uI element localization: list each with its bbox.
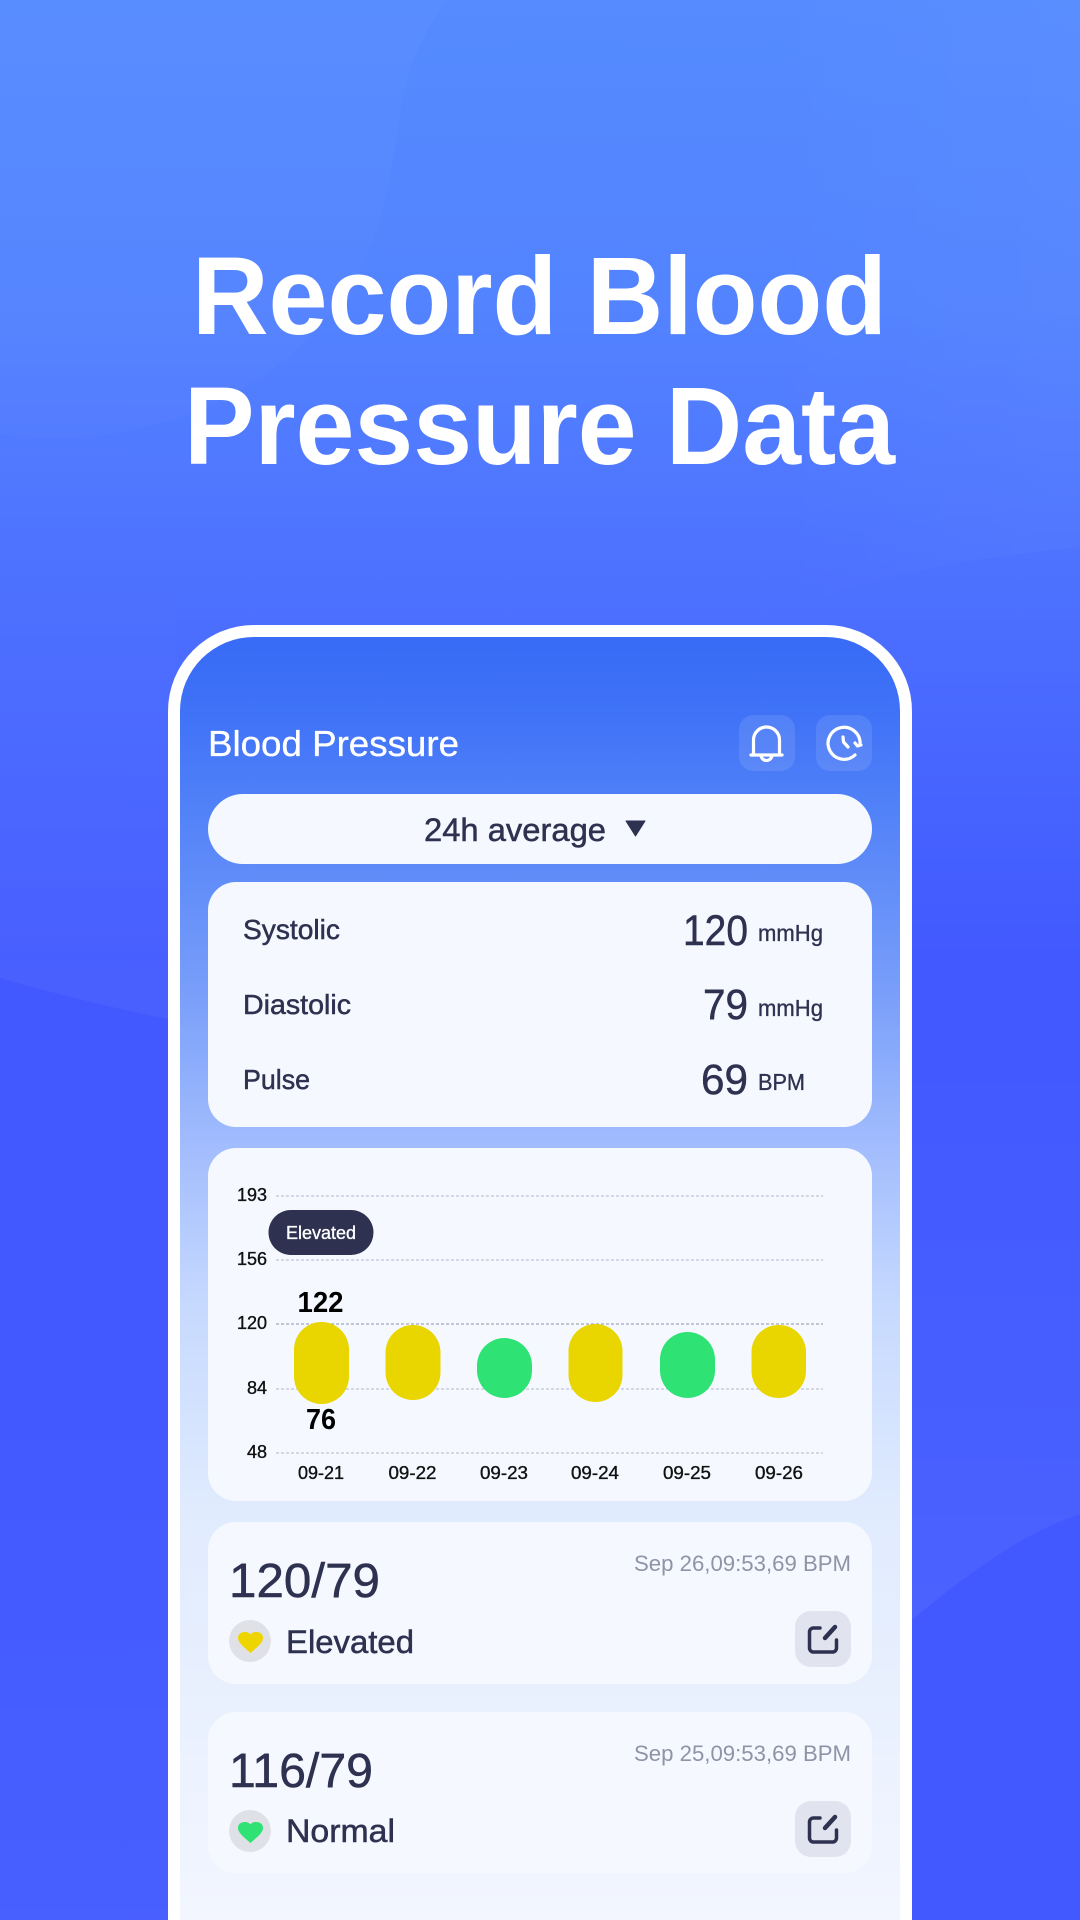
reading value: 120/79 — [229, 1555, 380, 1608]
reading value: 116/79 — [229, 1745, 373, 1798]
systolic row: mmHg — [758, 920, 823, 946]
diastolic row: Diastolic — [243, 989, 351, 1020]
panel: current readings — [208, 882, 872, 1127]
selected bar values — [298, 1287, 344, 1436]
dropdown: 24h average — [208, 794, 872, 864]
diastolic row — [243, 981, 823, 1029]
pulse row: 69 — [701, 1056, 748, 1104]
selected bar values: 76 — [306, 1404, 336, 1436]
record card: Sep 26 — [208, 1522, 872, 1684]
selected bar values: 122 — [298, 1287, 344, 1319]
icon: edit button — [795, 1801, 851, 1857]
x axis dates: 09-26 — [755, 1463, 803, 1483]
icon: history clock button — [816, 715, 872, 771]
y axis labels: 156 — [237, 1249, 267, 1269]
diastolic row: 79 — [703, 981, 748, 1029]
title: Record Blood — [192, 235, 887, 358]
dropdown: 24h average: 24h average — [424, 812, 606, 848]
icon: green heart — [229, 1810, 271, 1852]
title — [184, 235, 896, 488]
x axis dates: 09-22 — [388, 1463, 436, 1483]
systolic row: 120 — [683, 907, 748, 955]
range bars — [294, 1322, 806, 1404]
x axis dates: 09-25 — [663, 1463, 711, 1483]
pulse row — [243, 1056, 805, 1104]
icon: yellow heart — [229, 1620, 271, 1662]
title: Pressure Data — [184, 365, 896, 488]
status label: Elevated — [286, 1624, 414, 1660]
status label: Normal — [286, 1813, 395, 1849]
x axis dates: 09-21 — [298, 1463, 344, 1483]
y axis labels: 120 — [237, 1313, 267, 1333]
pulse row: BPM — [758, 1069, 805, 1095]
systolic row — [243, 907, 823, 955]
y axis labels — [237, 1185, 267, 1462]
icon: bell button — [739, 715, 795, 771]
tooltip: Elevated — [268, 1210, 374, 1255]
x axis dates: 09-24 — [571, 1463, 619, 1483]
tooltip: Elevated: Elevated — [286, 1223, 356, 1243]
x axis dates — [298, 1463, 803, 1483]
x axis dates: 09-23 — [480, 1463, 528, 1483]
date and pulse: Sep 25,09:53,69 BPM — [634, 1741, 851, 1766]
diastolic row: mmHg — [758, 995, 823, 1021]
panel: range chart — [208, 1148, 872, 1501]
record card: Sep 25 — [208, 1712, 872, 1873]
y axis labels: 193 — [237, 1185, 267, 1205]
app header title: Blood Pressure — [208, 723, 459, 764]
y axis labels: 84 — [247, 1378, 267, 1398]
y axis labels: 48 — [247, 1442, 267, 1462]
pulse row: Pulse — [243, 1064, 310, 1095]
date and pulse: Sep 26,09:53,69 BPM — [634, 1551, 851, 1576]
icon: edit button — [795, 1611, 851, 1667]
phone frame — [168, 625, 912, 1920]
systolic row: Systolic — [243, 914, 340, 945]
